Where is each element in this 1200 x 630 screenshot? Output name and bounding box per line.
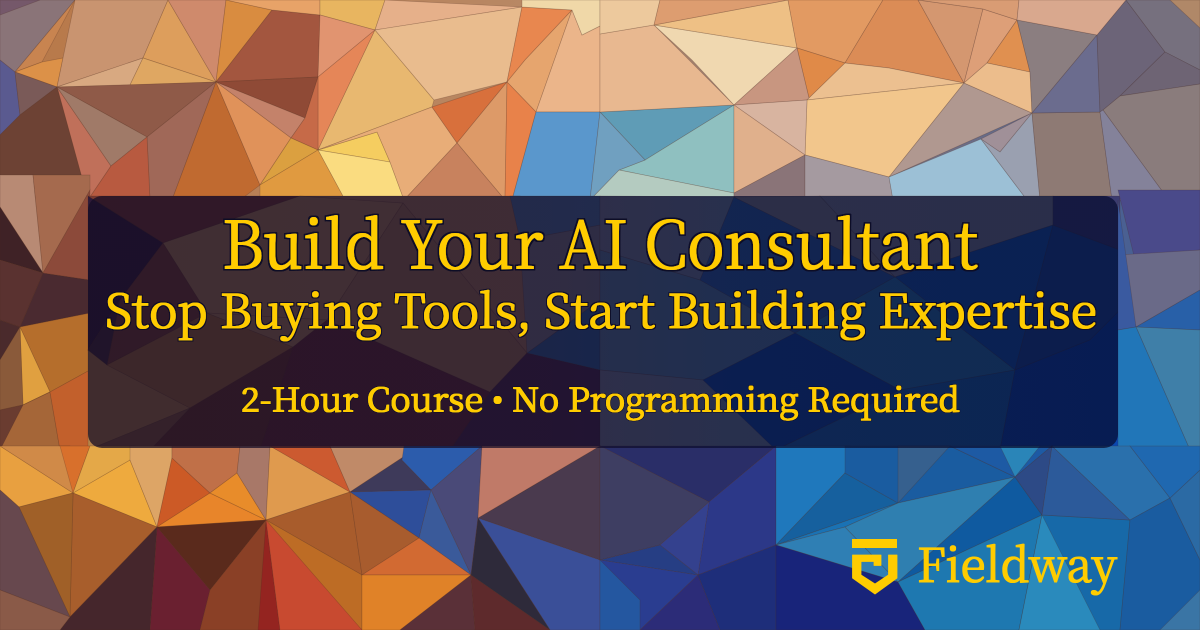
- logo: Fieldway brand: [852, 529, 1117, 596]
- subtitle: Stop Buying Tools, Start Building Expertise: [105, 275, 1097, 342]
- title: Build Your AI Consultant: [222, 192, 978, 288]
- panel: translucent dark title panel: [88, 196, 1118, 448]
- course details line: 2-Hour Course • No Programming Required: [241, 374, 960, 422]
- wordmark: Fieldway: [917, 529, 1117, 596]
- icon: shield mark: [852, 539, 897, 594]
